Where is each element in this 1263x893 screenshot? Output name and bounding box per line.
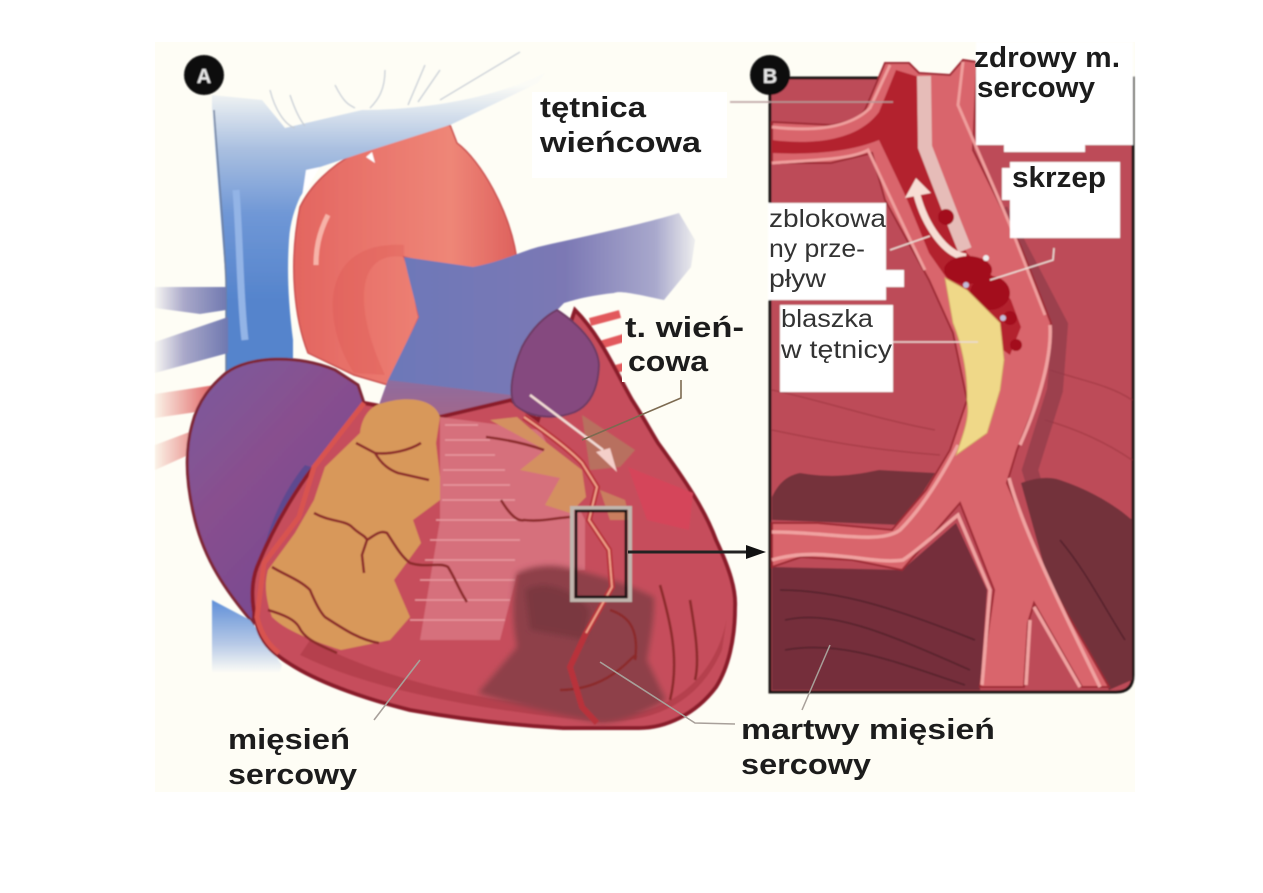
dark halo along artery <box>1000 210 1100 660</box>
label: martwy mięsień sercowy: martwy mięsień <box>741 714 995 746</box>
zoom box <box>572 508 630 600</box>
right red vessels <box>590 314 642 370</box>
flow arrow <box>905 178 966 257</box>
heart ventricles <box>252 310 735 728</box>
clot <box>938 209 1022 351</box>
pulmonary artery <box>370 213 695 440</box>
label: t. wieńcowa <box>582 312 747 440</box>
panel A: heart illustration <box>155 52 735 728</box>
label: mięsień sercowy: mięsień <box>228 724 350 756</box>
artery <box>772 60 1109 687</box>
left atrium <box>511 310 599 417</box>
badge A: A <box>197 66 211 88</box>
label: blaszka w tętnicy <box>780 305 893 364</box>
lower vena cava <box>212 600 282 672</box>
label: t. wieńcowa: cowa <box>628 346 709 378</box>
label: tętnica wieńcowa: tętnica <box>540 92 647 124</box>
label: zdrowy m. sercowy: zdrowy m. <box>974 42 1120 74</box>
label: mięsień sercowy: sercowy <box>228 759 357 791</box>
label: tętnica wieńcowa <box>532 92 727 178</box>
leader: panel B muscle <box>802 645 830 710</box>
fat deposits <box>266 399 635 650</box>
superior vena cava and branches <box>212 73 545 423</box>
left veins <box>155 287 228 373</box>
label: t. wieńcowa: t. wień- <box>625 312 744 344</box>
white overlays for labels <box>768 42 1133 392</box>
label: blaszka w tętnicy: w tętnicy <box>780 336 893 364</box>
leader lines <box>730 101 893 103</box>
left red vessels <box>155 385 215 470</box>
heart lower dark band <box>300 610 728 722</box>
label: mięsień sercowy <box>228 660 420 791</box>
badge B: B <box>763 66 777 88</box>
coronary arteries <box>257 403 612 723</box>
label: martwy mięsień sercowy <box>600 662 995 781</box>
muscle fibres <box>772 370 1132 460</box>
right atrium <box>187 359 364 623</box>
label: tętnica wieńcowa: wieńcowa <box>539 127 702 159</box>
coronary branches <box>268 437 697 700</box>
pale stripe <box>924 76 965 250</box>
coronary white arrow <box>530 395 617 472</box>
panel B: artery detail <box>730 42 1133 692</box>
blood lumen <box>772 70 1021 355</box>
label: zablokowany przepływ: zblokowa <box>769 205 886 233</box>
plaque <box>945 278 1004 455</box>
label: skrzep: skrzep <box>1012 162 1106 194</box>
label: zablokowany przepływ <box>769 205 886 293</box>
dead muscle right <box>1021 478 1132 690</box>
striated pale area <box>420 417 585 640</box>
label: zdrowy m. sercowy: sercowy <box>977 72 1095 104</box>
label: zablokowany przepływ: ny prze- <box>769 235 865 263</box>
label: zdrowy m. sercowy <box>974 42 1120 104</box>
badge A <box>184 55 224 95</box>
dead heart muscle <box>478 566 666 723</box>
dead muscle upper <box>772 470 935 525</box>
badge B <box>750 55 790 95</box>
label: blaszka w tętnicy: blaszka <box>781 305 873 333</box>
illustration background <box>155 42 1135 792</box>
white fingers above vena cava <box>270 52 520 128</box>
aorta <box>294 125 517 385</box>
arrow to detail panel <box>628 545 766 559</box>
artery wall highlights <box>772 325 1100 687</box>
dead muscle lower <box>772 523 987 690</box>
label: zablokowany przepływ: pływ <box>769 265 827 293</box>
bright red patch <box>628 467 693 530</box>
label: martwy mięsień sercowy: sercowy <box>741 749 871 781</box>
